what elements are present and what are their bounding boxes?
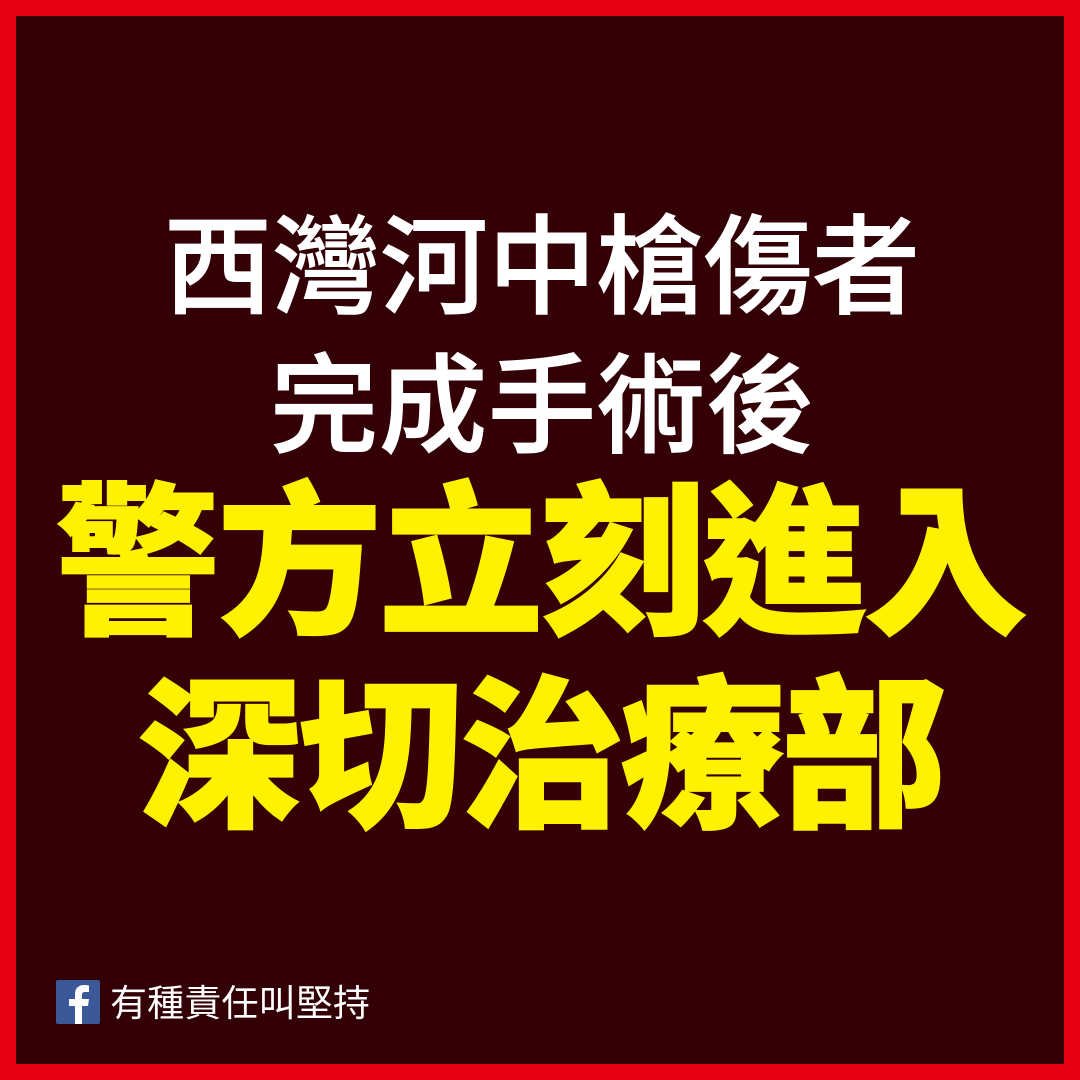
icon: facebook logo: [56, 980, 100, 1024]
heading: yellow line 4: 深切治療部: [138, 666, 946, 849]
heading: white line 1: 西灣河中槍傷者: [164, 207, 920, 328]
footer text: 有種責任叫堅持: [110, 983, 370, 1024]
heading: yellow line 3: 警方立刻進入: [56, 473, 1028, 656]
footer: facebook page credit: [56, 980, 370, 1024]
heading: white line 2: 完成手術後: [270, 346, 814, 467]
